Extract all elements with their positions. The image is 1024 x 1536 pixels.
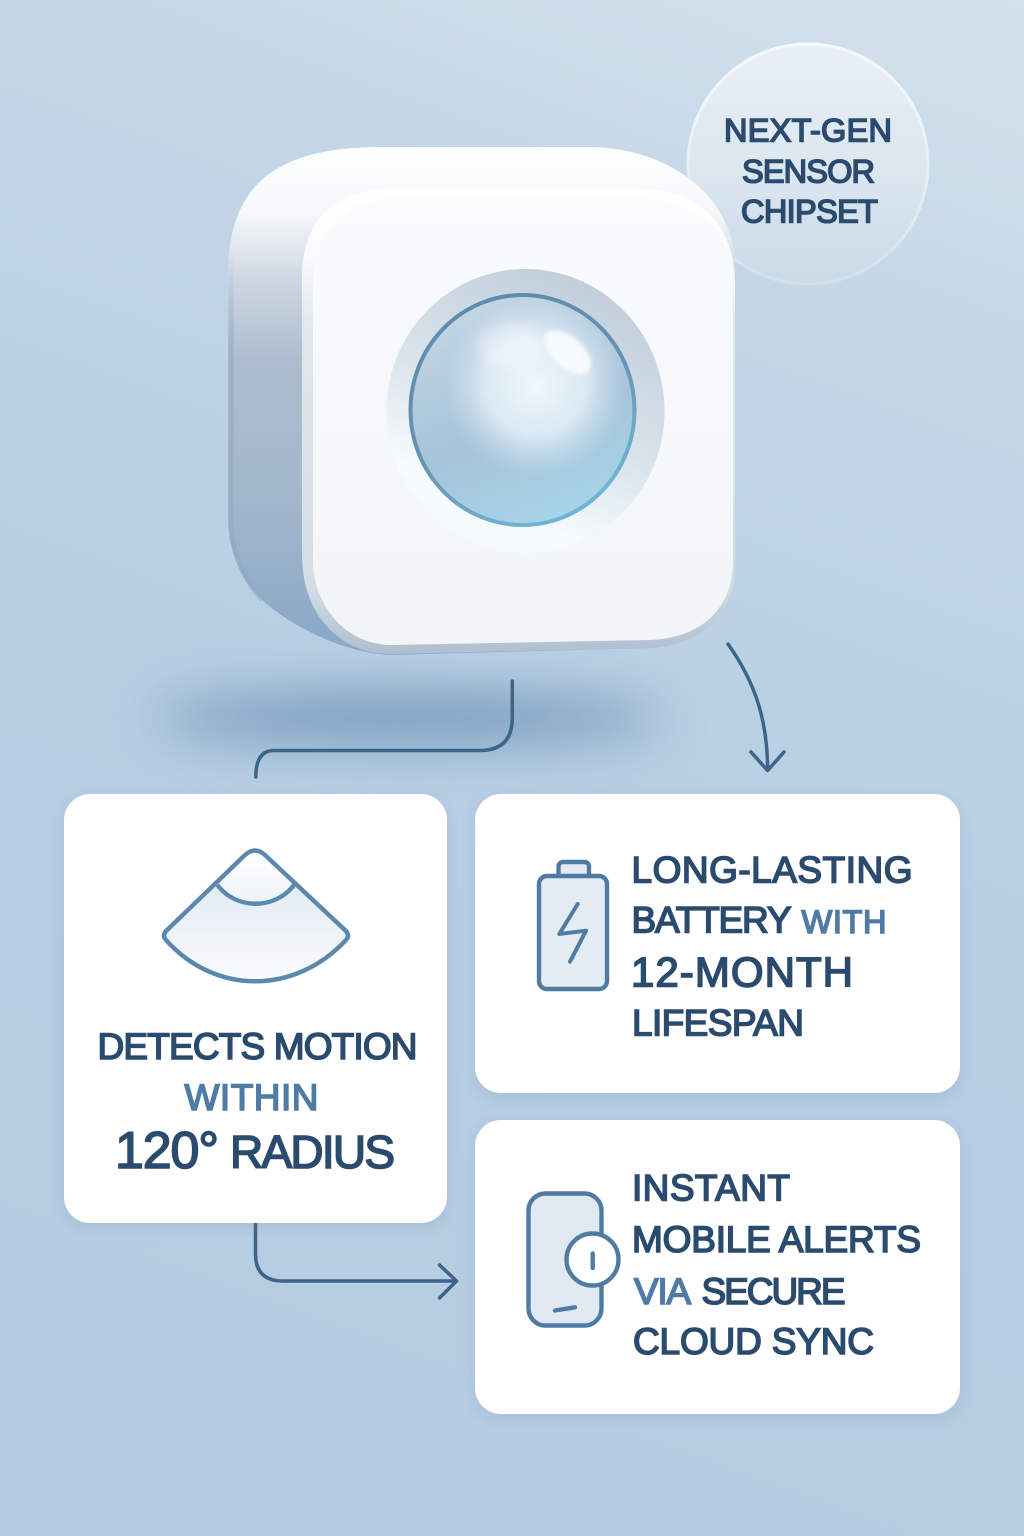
battery text: WITH [802,904,886,940]
sensor device illustration [152,147,735,772]
motion detection text [98,1026,418,1180]
battery text: LIFESPAN [632,1002,804,1044]
mobile alerts text: INSTANT [632,1168,790,1208]
mobile alerts text: VIA [634,1271,691,1312]
motion detection text: RADIUS [230,1126,395,1178]
icon: phone alert [526,1191,621,1328]
chipset badge text: SENSOR [742,154,875,190]
icon: detection cone [162,848,350,984]
chipset badge text: CHIPSET [741,194,878,230]
mobile alerts text: SECURE [702,1271,846,1312]
mobile alerts text: MOBILE ALERTS [632,1219,921,1260]
panel: battery [475,794,960,1093]
motion detection text: WITHIN [184,1077,318,1118]
battery text: LONG-LASTING [632,850,912,890]
mobile alerts text: CLOUD SYNC [633,1321,874,1362]
icon: battery [536,860,610,992]
chipset badge text: NEXT-GEN [724,112,892,148]
motion detection text: 120° [115,1122,219,1180]
battery text: 12-MONTH [631,948,853,996]
battery text: BATTERY [632,900,792,940]
panel: mobile alerts [475,1120,960,1414]
mobile alerts text [632,1168,921,1362]
motion detection text: DETECTS MOTION [98,1026,418,1067]
chipset badge text [724,112,892,230]
chipset badge [686,42,930,286]
panel: motion detection [64,794,447,1223]
battery text [631,850,912,1044]
